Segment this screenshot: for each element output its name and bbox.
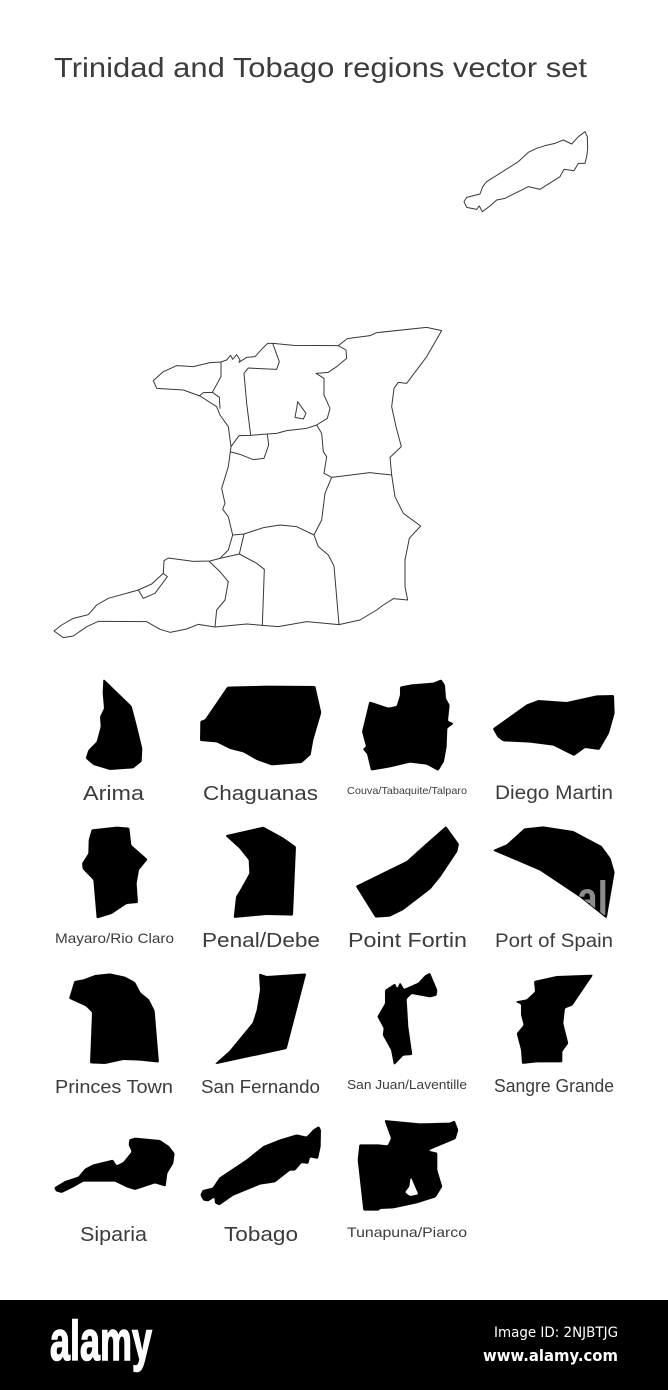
label: Tobago bbox=[224, 1224, 298, 1246]
shape bbox=[69, 973, 159, 1064]
region borders bbox=[138, 343, 392, 627]
label: Chaguanas bbox=[203, 783, 318, 805]
label: Point Fortin bbox=[348, 930, 467, 952]
region: Arima bbox=[83, 679, 145, 805]
coastline bbox=[54, 327, 442, 638]
shape bbox=[200, 1126, 321, 1205]
logo: alamy: alamy bbox=[50, 1309, 152, 1372]
label: Arima bbox=[83, 783, 145, 805]
label: San Juan/Laventille bbox=[347, 1077, 467, 1092]
map: Tobago outline bbox=[464, 132, 588, 212]
label: Siparia bbox=[80, 1224, 148, 1246]
region: Couva/Tabaquite/Talparo bbox=[347, 679, 467, 797]
region: San Juan/Laventille bbox=[347, 973, 467, 1092]
shape bbox=[214, 973, 306, 1065]
shape bbox=[356, 826, 459, 918]
label: Mayaro/Rio Claro bbox=[55, 930, 174, 946]
watermark fragment: al bbox=[577, 873, 608, 926]
image id: Image ID: 2NJBTJG bbox=[494, 1325, 618, 1341]
shape bbox=[82, 827, 148, 919]
shape bbox=[377, 973, 437, 1065]
region: Princes Town bbox=[55, 973, 173, 1097]
label: Port of Spain bbox=[495, 931, 613, 952]
region: Diego Martin bbox=[493, 695, 615, 804]
shape bbox=[86, 679, 142, 770]
shape bbox=[225, 827, 296, 918]
region: San Fernando bbox=[201, 973, 320, 1097]
label: San Fernando bbox=[201, 1076, 320, 1097]
shape bbox=[54, 1138, 175, 1193]
label: Tunapuna/Piarco bbox=[347, 1224, 467, 1240]
label: Princes Town bbox=[55, 1076, 173, 1097]
label: Diego Martin bbox=[495, 783, 613, 804]
region: Port of Spain bbox=[492, 826, 615, 952]
lake bbox=[295, 402, 306, 419]
region: Tobago bbox=[200, 1126, 321, 1246]
website: www.alamy.com bbox=[483, 1346, 618, 1365]
label: Couva/Tabaquite/Talparo bbox=[347, 785, 467, 797]
region: Penal/Debe bbox=[202, 827, 320, 952]
region: Sangre Grande bbox=[494, 975, 614, 1096]
shape bbox=[358, 1120, 458, 1211]
label: Sangre Grande bbox=[494, 1076, 614, 1096]
map: Trinidad regions outline bbox=[54, 327, 442, 638]
shape bbox=[493, 695, 615, 756]
region: Siparia bbox=[54, 1138, 175, 1246]
region: Mayaro/Rio Claro bbox=[55, 827, 174, 946]
shape bbox=[515, 975, 593, 1064]
region: Tunapuna/Piarco bbox=[347, 1120, 467, 1240]
footer bar bbox=[0, 1300, 668, 1390]
shape bbox=[492, 826, 615, 919]
shape bbox=[200, 686, 321, 765]
region: Point Fortin bbox=[348, 826, 467, 952]
region: Chaguanas bbox=[200, 686, 321, 805]
shape bbox=[362, 679, 454, 771]
label: Penal/Debe bbox=[202, 930, 320, 952]
title: Trinidad and Tobago regions vector set bbox=[54, 52, 587, 83]
